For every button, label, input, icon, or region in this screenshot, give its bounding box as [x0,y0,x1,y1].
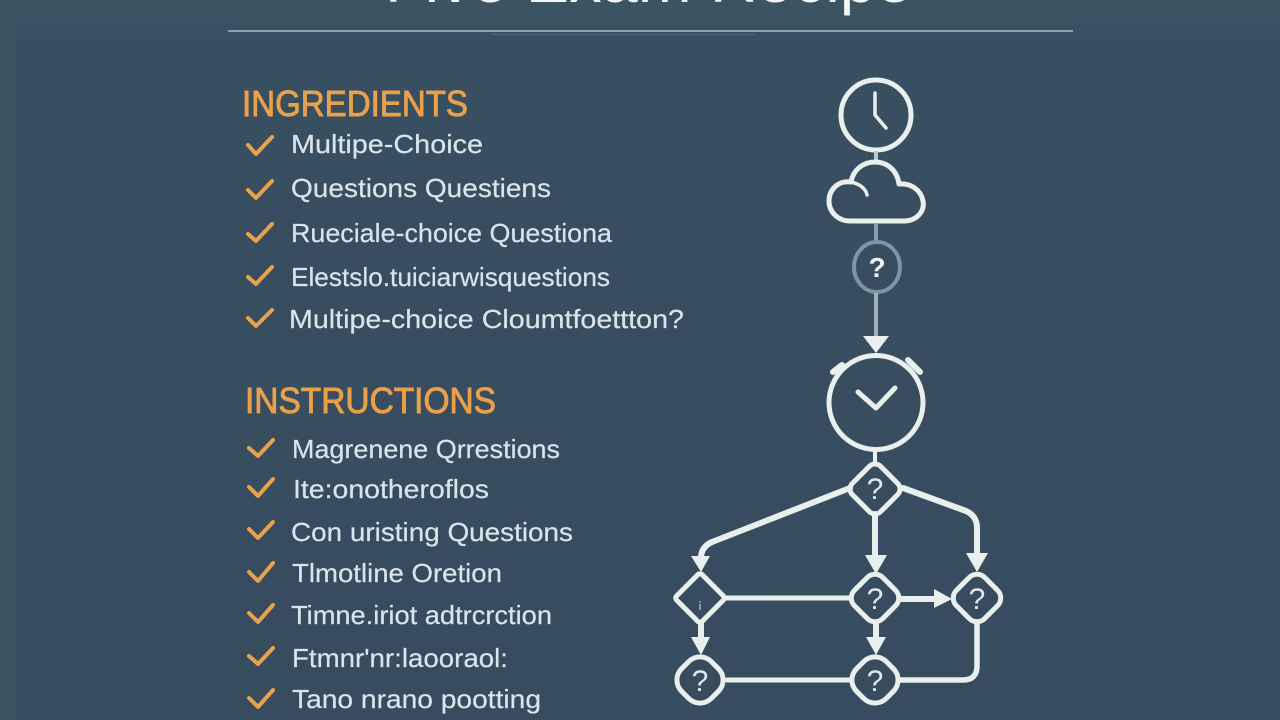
instruction 6: Ftmnr'nr:laooraol: [292,643,508,673]
icon: cloud [829,162,923,221]
connector: stopwatch to top decision [873,451,877,465]
decision: left [675,573,725,623]
decision: middle [847,570,903,626]
icon: stopwatch with check [829,356,923,450]
arrow: top decision to middle decision [865,514,887,574]
arrow: middle to right decision [900,589,952,608]
arrow: middle decision down [866,624,886,655]
connector: left to middle decision [727,596,850,600]
arrow: left decision down [691,624,710,655]
flowchart [670,80,1005,710]
icon: question circle: ? [868,252,886,283]
instruction 1: Magrenene Qrrestions [292,434,560,464]
heading: ingredients: INGREDIENTS [242,83,468,124]
decision: top [847,461,903,517]
decision: right [949,570,1005,626]
decision: right: ? [969,583,985,616]
arrow: question to stopwatch [863,293,889,353]
arrow: top decision to right decision [903,488,988,572]
decision: bottom middle: ? [867,665,883,698]
icon: question circle [854,242,900,292]
panel: instructions [245,380,573,714]
decision: bottom middle [845,650,905,710]
ingredient 1: Multipe-Choice [291,129,483,159]
instruction 7: Tano nrano pootting [292,684,541,714]
connector: bottom left to bottom middle [727,678,850,682]
instruction 2: Ite:onotheroflos [293,474,489,504]
decision: left: ¡ [698,596,702,611]
decision: bottom left: ? [692,665,708,698]
instruction 5: Timne.iriot adtrcrction [291,600,552,630]
arrow: top decision to left decision [691,488,850,572]
connector: bottom middle to right decision [900,622,977,680]
title divider [228,31,1073,34]
ingredient 5: Multipe-choice Cloumtfoettton? [289,304,684,334]
instruction 4: Tlmotline Oretion [292,558,502,588]
instruction 3: Con uristing Questions [291,517,573,547]
icon: clock [841,80,911,150]
ingredient 2: Questions Questiens [291,173,551,203]
panel: ingredients [242,83,684,334]
connector: clock to cloud [874,151,878,161]
decision: bottom left [670,650,730,710]
decision: top: ? [867,473,883,506]
heading: instructions: INSTRUCTIONS [245,380,496,421]
decision: middle: ? [867,583,883,616]
connector: cloud to question [874,223,878,241]
ingredient 4: Elestslo.tuiciarwisquestions [291,262,610,292]
ingredient 3: Rueciale-choice Questiona [291,218,613,248]
